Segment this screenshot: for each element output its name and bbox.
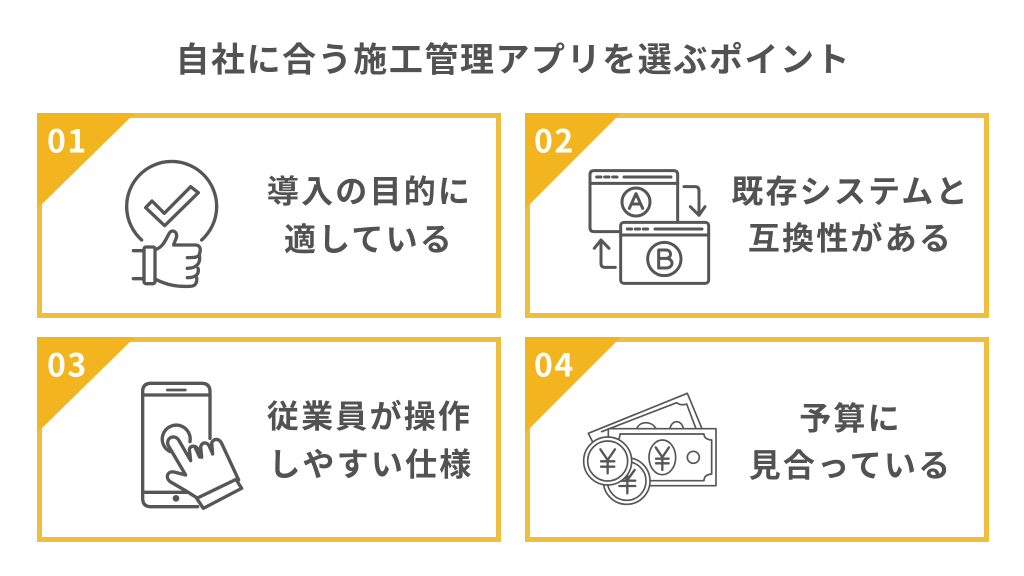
text 04: 見合っている bbox=[749, 440, 952, 486]
number 02: 02 bbox=[534, 116, 575, 162]
text 03: しやすい仕様 bbox=[269, 440, 473, 486]
text 01: 導入の目的に bbox=[267, 166, 472, 212]
panel: 01 purpose bbox=[37, 113, 498, 316]
corner badge 04 bbox=[525, 337, 621, 433]
text 04: 予算に bbox=[799, 394, 902, 440]
corner badge 02 bbox=[525, 113, 621, 209]
text 04 bbox=[749, 394, 952, 486]
card frame 01 bbox=[40, 116, 498, 316]
icon: banknotes and yen coins bbox=[584, 393, 716, 504]
panel: 02 compatibility bbox=[525, 113, 986, 316]
card frame 03 bbox=[40, 340, 498, 540]
card frame 04 bbox=[528, 340, 986, 540]
text 03: 従業員が操作 bbox=[267, 392, 472, 438]
panel: 04 budget bbox=[525, 337, 986, 540]
text 02: 互換性がある bbox=[748, 214, 953, 260]
text 01 bbox=[267, 166, 472, 260]
number 01: 01 bbox=[47, 116, 88, 162]
panel: 03 usability bbox=[37, 337, 498, 540]
text 02 bbox=[731, 166, 970, 260]
text 02: 既存システムと bbox=[731, 166, 970, 212]
title: 自社に合う施工管理アプリを選ぶポイント bbox=[176, 32, 850, 82]
icon: two app windows with arrows bbox=[590, 171, 709, 283]
corner badge 01 bbox=[37, 113, 135, 209]
card frame 02 bbox=[528, 116, 986, 316]
number 03: 03 bbox=[47, 340, 88, 386]
icon: thumbs up with check bbox=[127, 161, 217, 286]
text 01: 適している bbox=[284, 214, 454, 260]
icon: smartphone tap bbox=[143, 383, 242, 508]
number 04: 04 bbox=[534, 340, 575, 386]
corner badge 03 bbox=[37, 337, 135, 433]
text 03 bbox=[267, 392, 473, 486]
